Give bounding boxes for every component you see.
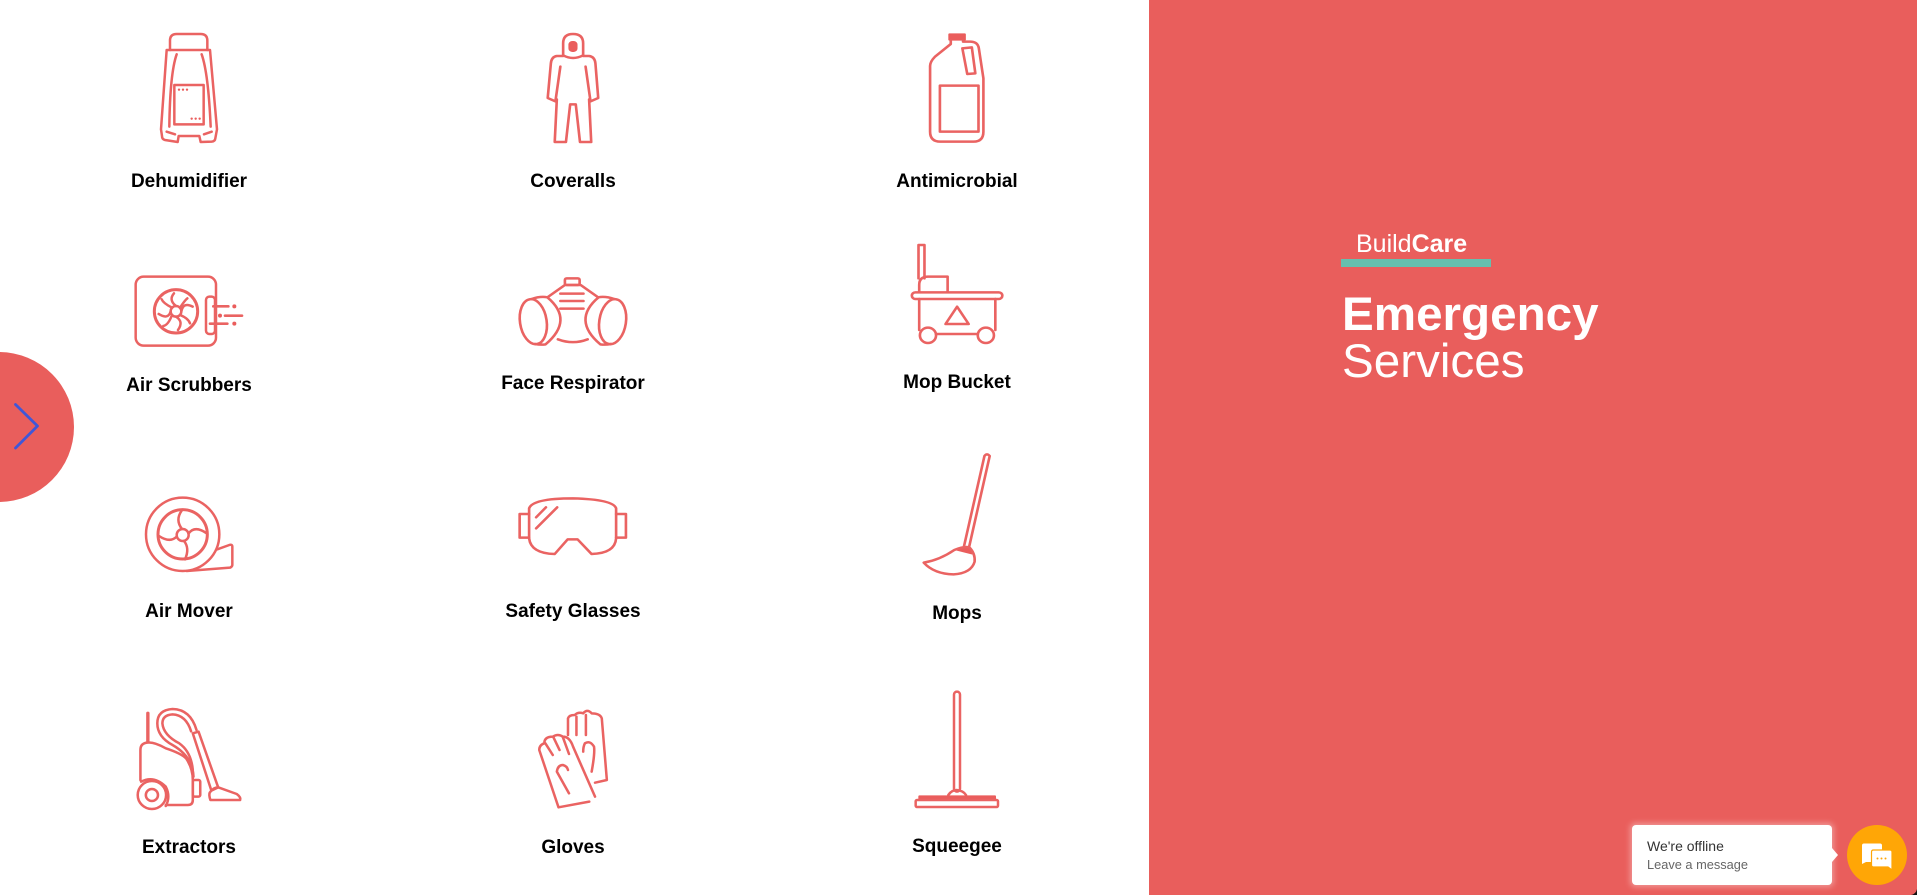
label: Face Respirator: Face Respirator (501, 373, 645, 394)
label: Mops: Mops (932, 603, 982, 624)
chat bubble: offline message: Leave a message (1647, 857, 1748, 872)
label: Air Mover: Air Mover (145, 601, 233, 622)
chat bubble: offline message (1630, 823, 1838, 887)
chat launcher button (1847, 825, 1907, 885)
label: Extractors: Extractors (142, 837, 236, 858)
label: Dehumidifier: Dehumidifier (131, 171, 248, 192)
title: Emergency Services (1342, 288, 1599, 388)
label: Air Scrubbers: Air Scrubbers (126, 375, 252, 396)
brand logo: BuildCare: BuildCare (1356, 230, 1467, 258)
label: Gloves: Gloves (541, 837, 605, 858)
brand logo: BuildCare (1341, 230, 1491, 267)
icon: mop (924, 454, 990, 574)
icon: face respirator (517, 278, 629, 346)
panel: coral title panel (1149, 0, 1917, 895)
icon: extractor vacuum (138, 709, 240, 809)
title: Emergency Services: Emergency (1342, 288, 1599, 341)
icon: squeegee (916, 692, 998, 807)
icon: air scrubber (136, 277, 242, 346)
icon: safety goggles (520, 498, 626, 554)
label: Safety Glasses: Safety Glasses (505, 601, 641, 622)
label: Coveralls: Coveralls (530, 171, 616, 192)
label: Antimicrobial: Antimicrobial (896, 171, 1018, 192)
icon: gloves (539, 711, 607, 807)
title: Emergency Services: Services (1342, 335, 1524, 388)
icon: air mover (146, 498, 232, 571)
icon: antimicrobial bottle (930, 33, 983, 142)
chat bubble: offline message: We're offline (1647, 838, 1724, 854)
icon: dehumidifier (161, 34, 217, 142)
label: Squeegee: Squeegee (912, 836, 1002, 857)
icon: coveralls (548, 34, 598, 142)
label: Mop Bucket: Mop Bucket (903, 372, 1012, 393)
next arrow button (0, 352, 74, 502)
icon: mop bucket (912, 245, 1002, 343)
